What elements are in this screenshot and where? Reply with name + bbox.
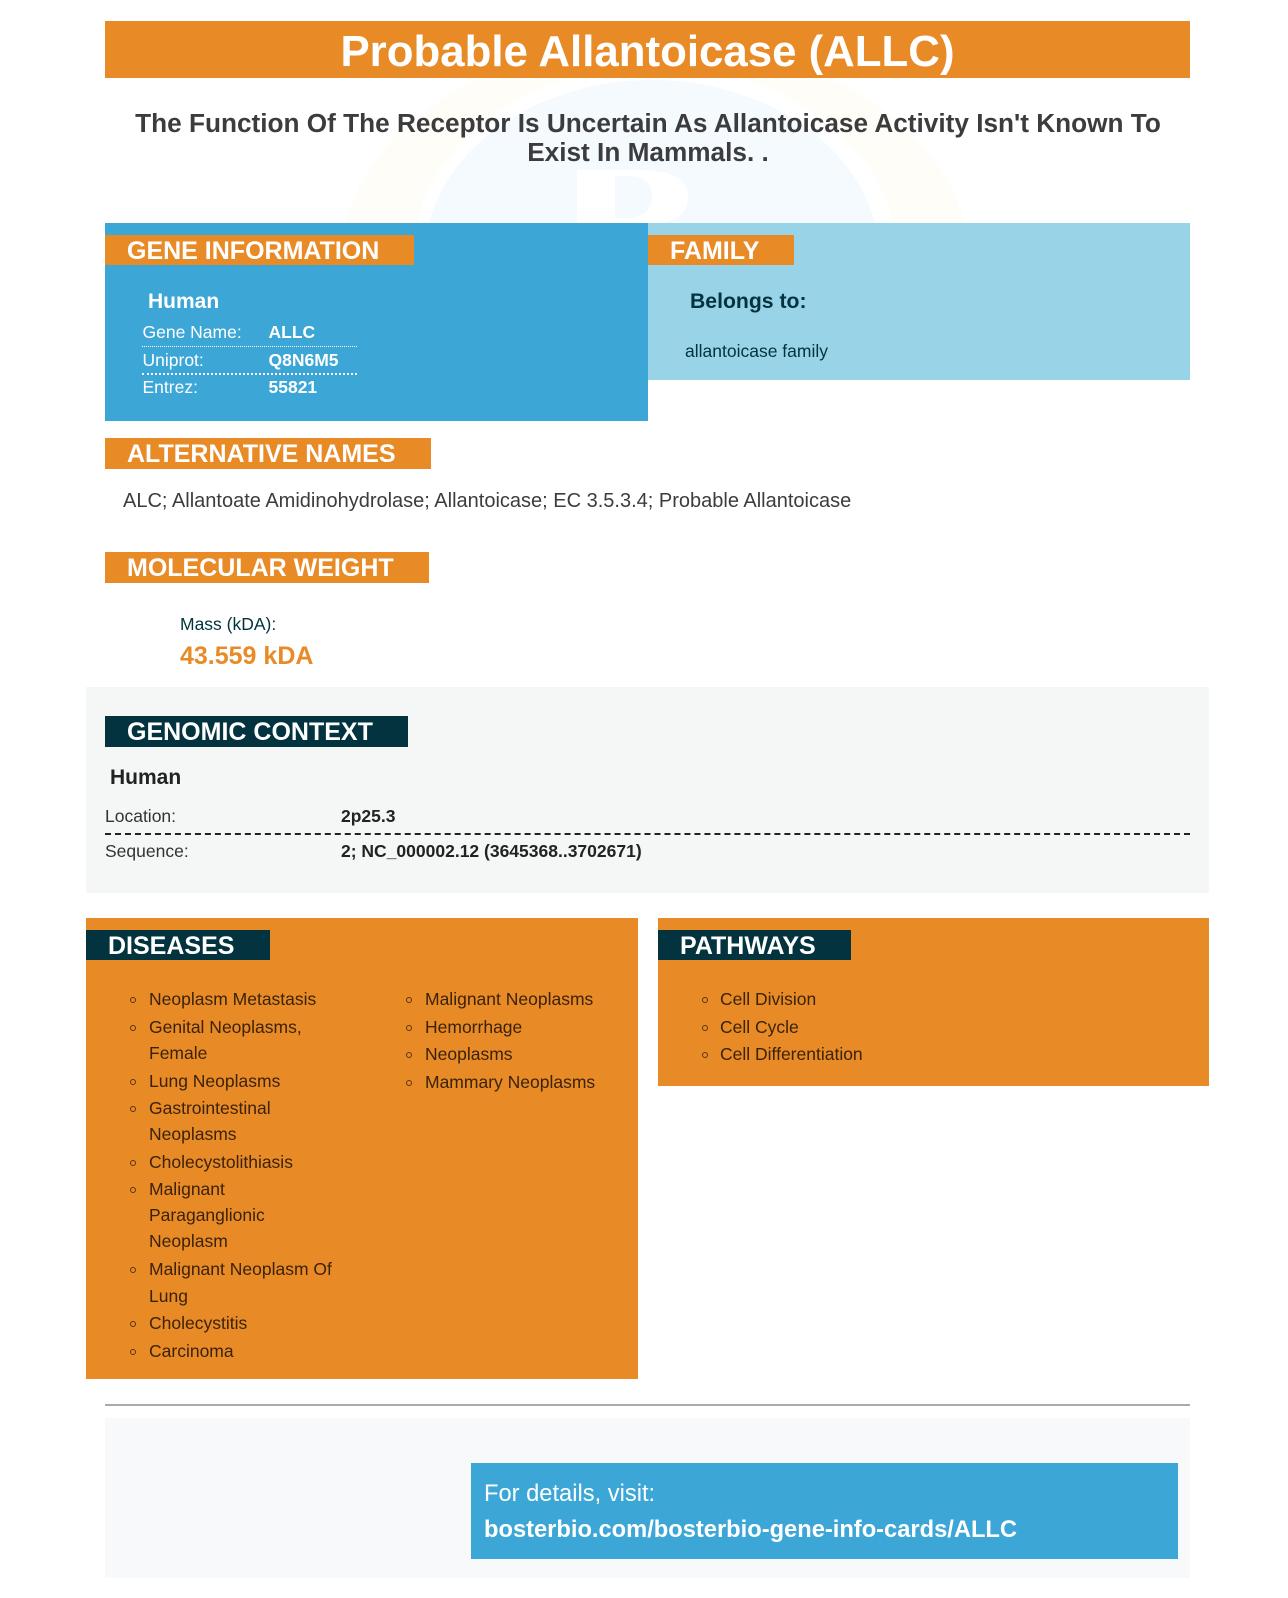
disease list column 1: Paraganglionic [149, 1205, 265, 1225]
uniprot row: Uniprot: [142, 350, 204, 370]
subtitle [135, 108, 1161, 167]
disease list column 1: Gastrointestinal [149, 1098, 271, 1118]
belongs to label: Belongs to: [690, 290, 807, 313]
species label: Human [110, 766, 181, 789]
sequence row: 2; NC_000002.12 (3645368..3702671) [341, 841, 642, 861]
entrez row [142, 377, 317, 397]
pathway list: Cell Differentiation [720, 1044, 863, 1064]
pathway list: Cell Cycle [720, 1017, 799, 1037]
pathway list [702, 989, 863, 1064]
disease list column 2: Neoplasms [425, 1044, 513, 1064]
species label: Human [148, 290, 219, 313]
gene name row [142, 320, 357, 347]
divider [105, 1404, 1190, 1406]
disease list column 1: Neoplasm Metastasis [149, 989, 316, 1009]
gene name row: Gene Name: [142, 322, 242, 342]
panel: footer [105, 1418, 1190, 1578]
family value: allantoicase family [685, 341, 828, 361]
location row: Location: [105, 806, 176, 826]
mass value: 43.559 kDA [180, 642, 313, 670]
disease list column 2 [406, 989, 595, 1092]
location row: 2p25.3 [341, 806, 395, 826]
heading: pathways: PATHWAYS [680, 932, 816, 960]
disease list column 1: Lung [149, 1286, 188, 1306]
disease list column 1: Cholecystolithiasis [149, 1152, 293, 1172]
sequence row [105, 841, 642, 861]
subtitle: The Function Of The Receptor Is Uncertain As Allantoicase Activity Isn't Known To [135, 108, 1161, 138]
heading: alternative names: ALTERNATIVE NAMES [127, 440, 396, 468]
panel: genomic context [86, 687, 1209, 893]
panel: gene information [105, 223, 648, 421]
entrez row: Entrez: [142, 377, 198, 397]
heading: pathways [658, 930, 851, 960]
disease list column 2: Malignant Neoplasms [425, 989, 593, 1009]
disease list column 1: Malignant Neoplasm Of [149, 1259, 332, 1279]
entrez row: 55821 [268, 377, 317, 397]
subtitle: Exist In Mammals. . [527, 137, 769, 167]
disease list column 1 [130, 989, 332, 1361]
heading: diseases: DISEASES [108, 932, 234, 960]
heading: family: FAMILY [670, 237, 759, 265]
disease list column 1: Neoplasm [149, 1231, 228, 1251]
heading: genomic context: GENOMIC CONTEXT [127, 718, 373, 746]
panel: diseases [86, 918, 638, 1379]
uniprot row [142, 347, 357, 375]
disease list column 2: Hemorrhage [425, 1017, 522, 1037]
disease list column 1: Malignant [149, 1179, 225, 1199]
callout: details link [471, 1463, 1178, 1559]
callout text: For details, visit: [484, 1481, 655, 1507]
disease list column 1: Lung Neoplasms [149, 1071, 280, 1091]
mass label: Mass (kDA): [180, 614, 276, 634]
sequence row: Sequence: [105, 841, 189, 861]
heading: molecular weight: MOLECULAR WEIGHT [127, 554, 394, 582]
heading: gene information: GENE INFORMATION [127, 237, 379, 265]
location row [105, 808, 1190, 835]
disease list column 2: Mammary Neoplasms [425, 1072, 595, 1092]
disease list column 1: Cholecystitis [149, 1313, 247, 1333]
watermark logo [429, 80, 875, 223]
alternative names text: ALC; Allantoate Amidinohydrolase; Allantoicase; EC 3.5.3.4; Probable Allantoicase [123, 490, 851, 512]
gene name row: ALLC [268, 322, 315, 342]
disease list column 1: Neoplasms [149, 1124, 237, 1144]
disease list column 1: Carcinoma [149, 1341, 234, 1361]
pathway list: Cell Division [720, 989, 816, 1009]
title banner: Probable Allantoicase (ALLC) [340, 27, 955, 76]
disease list column 1: Female [149, 1043, 207, 1063]
panel: family [648, 223, 1190, 380]
heading: diseases [86, 930, 270, 960]
heading: family [648, 235, 794, 265]
callout url: bosterbio.com/bosterbio-gene-info-cards/ALLC [484, 1517, 1017, 1543]
disease list column 1: Genital Neoplasms, [149, 1017, 302, 1037]
title banner [105, 21, 1190, 78]
uniprot row: Q8N6M5 [268, 350, 339, 370]
panel: pathways [658, 918, 1209, 1086]
